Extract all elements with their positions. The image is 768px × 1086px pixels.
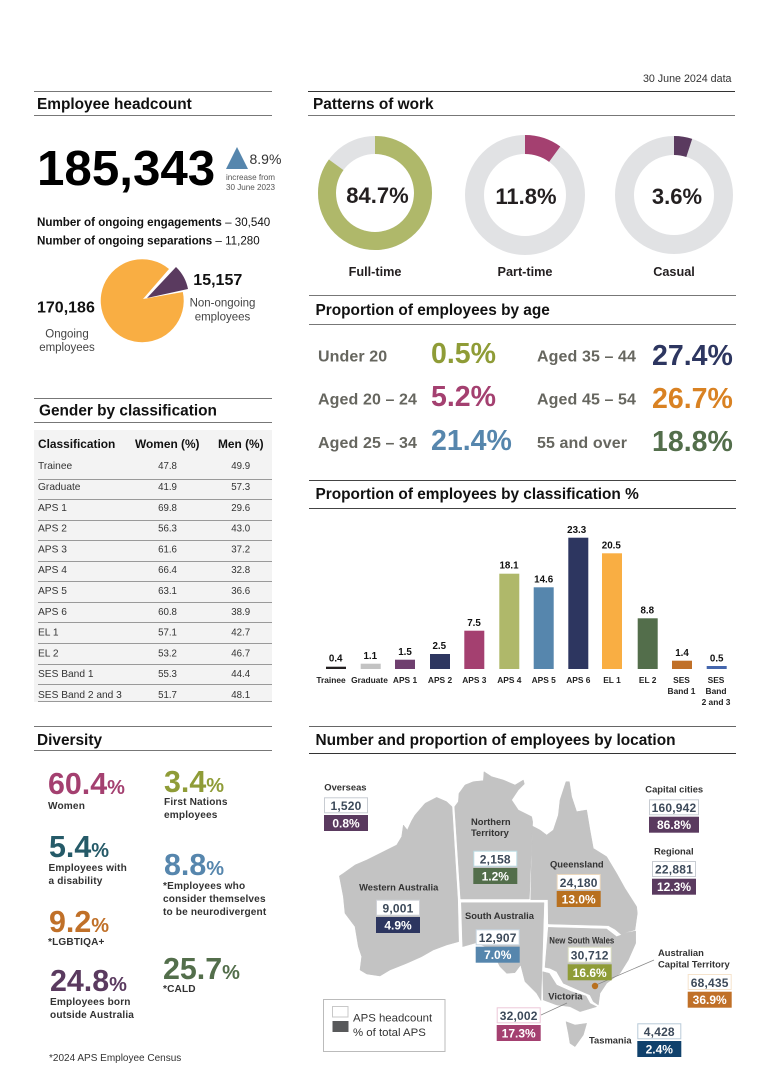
regional: 12.3% (657, 880, 691, 894)
panel: proportion by classification (309, 480, 736, 707)
stat: first nations: First Nations (164, 797, 228, 808)
stat: disability: Employees with (48, 863, 127, 874)
stat: neurodivergent (163, 848, 267, 918)
table rows: 41.9 (158, 482, 177, 493)
table rows: APS 2 (38, 524, 67, 534)
table rows: 60.8 (158, 607, 177, 618)
ongoing label (37, 300, 95, 354)
western australia (359, 882, 439, 933)
table header: Women (%) (135, 437, 200, 451)
australian capital territory (658, 947, 732, 1008)
table rows: 49.9 (231, 461, 250, 472)
heading: patterns of work: Patterns of work (313, 96, 434, 113)
south australia: South Australia (465, 910, 535, 921)
increase callout: increase from (226, 173, 275, 182)
donut: part-time: Part-time (498, 265, 552, 279)
panel: employee headcount (34, 92, 281, 354)
increase callout (226, 151, 281, 192)
bar chart: 0.4 (329, 654, 343, 664)
stat: born outside Australia (50, 964, 134, 1021)
age: 55 and over: 18.8% (652, 426, 733, 458)
bar chart: SES (673, 675, 690, 685)
bar chart: 0.5 (710, 654, 724, 664)
regional: Regional (654, 845, 694, 856)
table rows: Graduate (38, 482, 81, 493)
stat: CALD: 25.7% (163, 952, 240, 986)
overseas: 1,520 (330, 799, 362, 813)
panel: proportion by age (309, 296, 736, 458)
table rows: 42.7 (231, 628, 250, 638)
heading: diversity (34, 726, 272, 750)
table rows: 51.7 (158, 690, 177, 701)
table header (38, 437, 264, 451)
donut: casual: Casual (653, 265, 695, 279)
bar chart: 1.1 (363, 651, 378, 662)
bar chart: Band (706, 686, 726, 696)
queensland: Queensland (550, 859, 604, 870)
donut: full-time (327, 145, 423, 279)
table rows: APS 1 (38, 503, 67, 514)
stat: neurodivergent: consider themselves (163, 894, 266, 905)
donut: part-time (474, 144, 576, 279)
bar chart: 2 and 3 (702, 697, 731, 707)
capital cities: Capital cities (645, 783, 703, 794)
regional: 22,881 (655, 863, 693, 877)
table rows: 38.9 (231, 607, 250, 618)
engagements and separations: Number of ongoing engagements – 30,540 (37, 216, 270, 229)
tasmania: Tasmania (589, 1034, 632, 1045)
age: 20 to 24: 5.2% (431, 381, 496, 413)
table rows: 43.0 (231, 524, 251, 534)
legend (324, 1000, 445, 1052)
bar chart: 23.3 (567, 525, 587, 536)
table rows: SES Band 1 (38, 669, 94, 680)
age: 20 to 24: Aged 20 – 24 (318, 392, 417, 408)
age: 20 to 24 (318, 381, 496, 413)
table rows: 57.1 (158, 628, 177, 638)
age: under 20: Under 20 (318, 348, 387, 366)
non-ongoing label (190, 272, 255, 324)
bar chart: APS 3 (462, 675, 487, 685)
table rows: 44.4 (231, 669, 251, 680)
bar chart: Graduate (351, 675, 388, 685)
legend: % of total APS (353, 1027, 426, 1039)
bar chart: APS 5 (532, 675, 556, 685)
northern territory: Territory (471, 827, 510, 838)
overseas (324, 782, 368, 831)
bar chart: EL 1 (603, 675, 621, 685)
victoria: Victoria (548, 990, 583, 1001)
table rows: 61.6 (158, 544, 177, 556)
table rows (38, 461, 251, 701)
bar chart: APS 4 (497, 675, 522, 685)
panel: gender by classification (34, 398, 272, 702)
heading: diversity: Diversity (37, 732, 102, 749)
age: 45 to 54: 26.7% (652, 383, 733, 415)
table rows: SES Band 2 and 3 (38, 690, 122, 701)
northern territory (471, 816, 517, 884)
bar chart: APS 1 (393, 675, 417, 685)
stat: disability: 5.4% (49, 830, 109, 864)
stat: neurodivergent: to be neurodivergent (163, 907, 267, 918)
icon: increase triangle (226, 147, 248, 169)
stat: women: 60.4% (48, 767, 125, 801)
pie chart: ongoing vs non-ongoing (101, 259, 188, 342)
table rows: 55.3 (158, 669, 177, 680)
stat: neurodivergent: *Employees who (163, 881, 245, 892)
victoria: 17.3% (502, 1026, 536, 1040)
stat: LGBTIQA+: 9.2% (49, 905, 109, 939)
age: 35 to 44: 27.4% (652, 340, 733, 372)
victoria (497, 990, 583, 1041)
tasmania (589, 1024, 681, 1057)
Victoria leader line (541, 1003, 567, 1015)
table rows: EL 2 (38, 648, 59, 660)
bar chart: 20.5 (602, 540, 621, 552)
ongoing label: employees (39, 342, 95, 354)
heading: employee headcount (34, 92, 272, 116)
increase callout: 8.9% (250, 151, 281, 167)
table rows: 53.2 (158, 648, 177, 660)
bar chart: APS 6 (566, 675, 591, 685)
overseas: Overseas (324, 782, 367, 793)
donut: full-time: 84.7% (346, 183, 409, 208)
table rows: 29.6 (231, 503, 250, 514)
stat: first nations: 3.4% (164, 765, 224, 799)
table rows: 56.3 (158, 524, 177, 534)
engagements and separations (37, 216, 270, 247)
ongoing label: Ongoing (45, 329, 89, 341)
non-ongoing label: 15,157 (193, 272, 242, 289)
bar chart: 18.1 (499, 561, 519, 572)
bar chart: Band 1 (668, 686, 696, 696)
table background (34, 430, 272, 702)
new south wales: New South Wales (549, 934, 614, 945)
heading: gender by classification (34, 398, 272, 422)
heading: proportion by classification: Proportion of employees by classification % (316, 486, 639, 503)
western australia: 9,001 (382, 902, 414, 916)
table rows: EL 1 (38, 628, 59, 638)
increase callout: 30 June 2023 (226, 183, 276, 192)
non-ongoing label: employees (195, 312, 251, 324)
australian capital territory: 36.9% (693, 993, 727, 1007)
stat: born outside Australia: Employees born (50, 997, 131, 1008)
age: 55 and over (537, 426, 733, 458)
queensland: 24,180 (560, 876, 598, 890)
bar chart: 2.5 (432, 641, 447, 652)
regional (652, 845, 696, 895)
bar chart: Trainee (316, 675, 346, 685)
age: under 20: 0.5% (431, 338, 496, 370)
footnote: *2024 APS Employee Census (49, 1053, 181, 1064)
panel: location (309, 726, 736, 1057)
western australia: Western Australia (359, 882, 439, 893)
donut: casual: 3.6% (652, 184, 702, 209)
ACT leader line (596, 960, 654, 985)
table rows: 32.8 (231, 565, 250, 576)
bar chart: EL 2 (639, 675, 657, 685)
new south wales: 16.6% (573, 966, 607, 980)
stat: born outside Australia: outside Australia (50, 1010, 134, 1021)
queensland (550, 859, 604, 907)
table rows: 63.1 (158, 586, 177, 597)
heading: gender by classification: Gender by classification (39, 402, 217, 420)
engagements and separations: Number of ongoing separations – 11,280 (37, 234, 260, 247)
australian capital territory: Capital Territory (658, 959, 731, 970)
bar chart: 7.5 (467, 618, 481, 629)
table rows: 48.1 (231, 690, 250, 701)
donut: part-time: 11.8% (495, 184, 557, 209)
tasmania: 4,428 (644, 1025, 675, 1039)
age: 25 to 34: 21.4% (431, 425, 512, 457)
stat: LGBTIQA+: *LGBTIQA+ (48, 937, 105, 948)
legend: APS headcount (353, 1013, 433, 1025)
table rows: APS 5 (38, 586, 67, 597)
northern territory: Northern (471, 816, 511, 827)
western australia: 4.9% (384, 918, 412, 932)
capital cities (645, 783, 703, 833)
panel: diversity (34, 726, 272, 1064)
table header: Classification (38, 437, 115, 451)
northern territory: 1.2% (482, 870, 509, 884)
stat: CALD: *CALD (163, 984, 196, 995)
table rows: APS 4 (38, 565, 67, 576)
table rows: 66.4 (158, 565, 178, 576)
ongoing label: 170,186 (37, 300, 95, 317)
table rows: 37.2 (231, 544, 250, 556)
south australia: 12,907 (479, 931, 517, 945)
age: 55 and over: 55 and over (537, 435, 627, 452)
victoria: 32,002 (500, 1009, 538, 1023)
stat: born outside Australia: 24.8% (50, 964, 127, 998)
bar chart: 1.4 (675, 648, 689, 659)
stat: first nations (164, 765, 228, 821)
ACT marker (592, 983, 598, 989)
overseas: 0.8% (332, 816, 360, 830)
heading: proportion by classification (309, 480, 736, 508)
australian capital territory: 68,435 (691, 976, 729, 990)
table rows: APS 3 (38, 544, 67, 556)
capital cities: 86.8% (657, 818, 691, 832)
table rows: 46.7 (231, 648, 250, 660)
northern territory: 2,158 (480, 852, 511, 866)
south australia: 7.0% (484, 948, 512, 962)
stat: women: Women (48, 801, 85, 812)
panel: patterns of work (308, 92, 735, 279)
non-ongoing label: Non-ongoing (190, 298, 255, 310)
south australia (465, 910, 535, 963)
table rows: Trainee (38, 461, 72, 472)
heading: location: Number and proportion of employees by location (316, 732, 676, 749)
table rows: APS 6 (38, 607, 67, 618)
total headcount: 185,343 (37, 141, 215, 196)
stat: disability (48, 830, 127, 887)
table header: Men (%) (218, 437, 264, 451)
donut: full-time: Full-time (349, 265, 401, 279)
heading: proportion by age: Proportion of employees by age (316, 302, 550, 319)
date note: 30 June 2024 data (643, 73, 732, 85)
bar chart: SES (708, 675, 725, 685)
table rows: 69.8 (158, 503, 177, 514)
table rows: 47.8 (158, 461, 177, 472)
bar chart: APS 2 (428, 675, 452, 685)
age: 45 to 54 (537, 383, 733, 415)
stat: neurodivergent: 8.8% (164, 848, 224, 882)
age: under 20 (318, 338, 496, 370)
table rows: 36.6 (231, 586, 250, 597)
donut: casual (624, 146, 724, 279)
heading: employee headcount: Employee headcount (37, 96, 192, 113)
new south wales: 30,712 (571, 948, 609, 962)
tasmania: 2.4% (646, 1042, 673, 1056)
age: 25 to 34: Aged 25 – 34 (318, 435, 417, 452)
capital cities: 160,942 (652, 801, 697, 815)
bar chart: 1.5 (398, 647, 412, 658)
queensland: 13.0% (562, 892, 596, 906)
age: 35 to 44: Aged 35 – 44 (537, 348, 636, 366)
table rows: 57.3 (231, 482, 250, 493)
bar chart: 8.8 (640, 606, 655, 616)
age: 45 to 54: Aged 45 – 54 (537, 392, 636, 408)
new south wales (549, 934, 614, 980)
australian capital territory: Australian (658, 947, 704, 958)
map of Australia (339, 772, 637, 1047)
stat: disability: a disability (48, 876, 103, 887)
age: 25 to 34 (318, 425, 512, 457)
stat: first nations: employees (164, 810, 218, 821)
table rules (38, 480, 272, 702)
heading: proportion by age (309, 296, 736, 324)
bar chart (316, 525, 731, 707)
age: 35 to 44 (537, 340, 733, 372)
bar chart: 14.6 (534, 574, 554, 586)
